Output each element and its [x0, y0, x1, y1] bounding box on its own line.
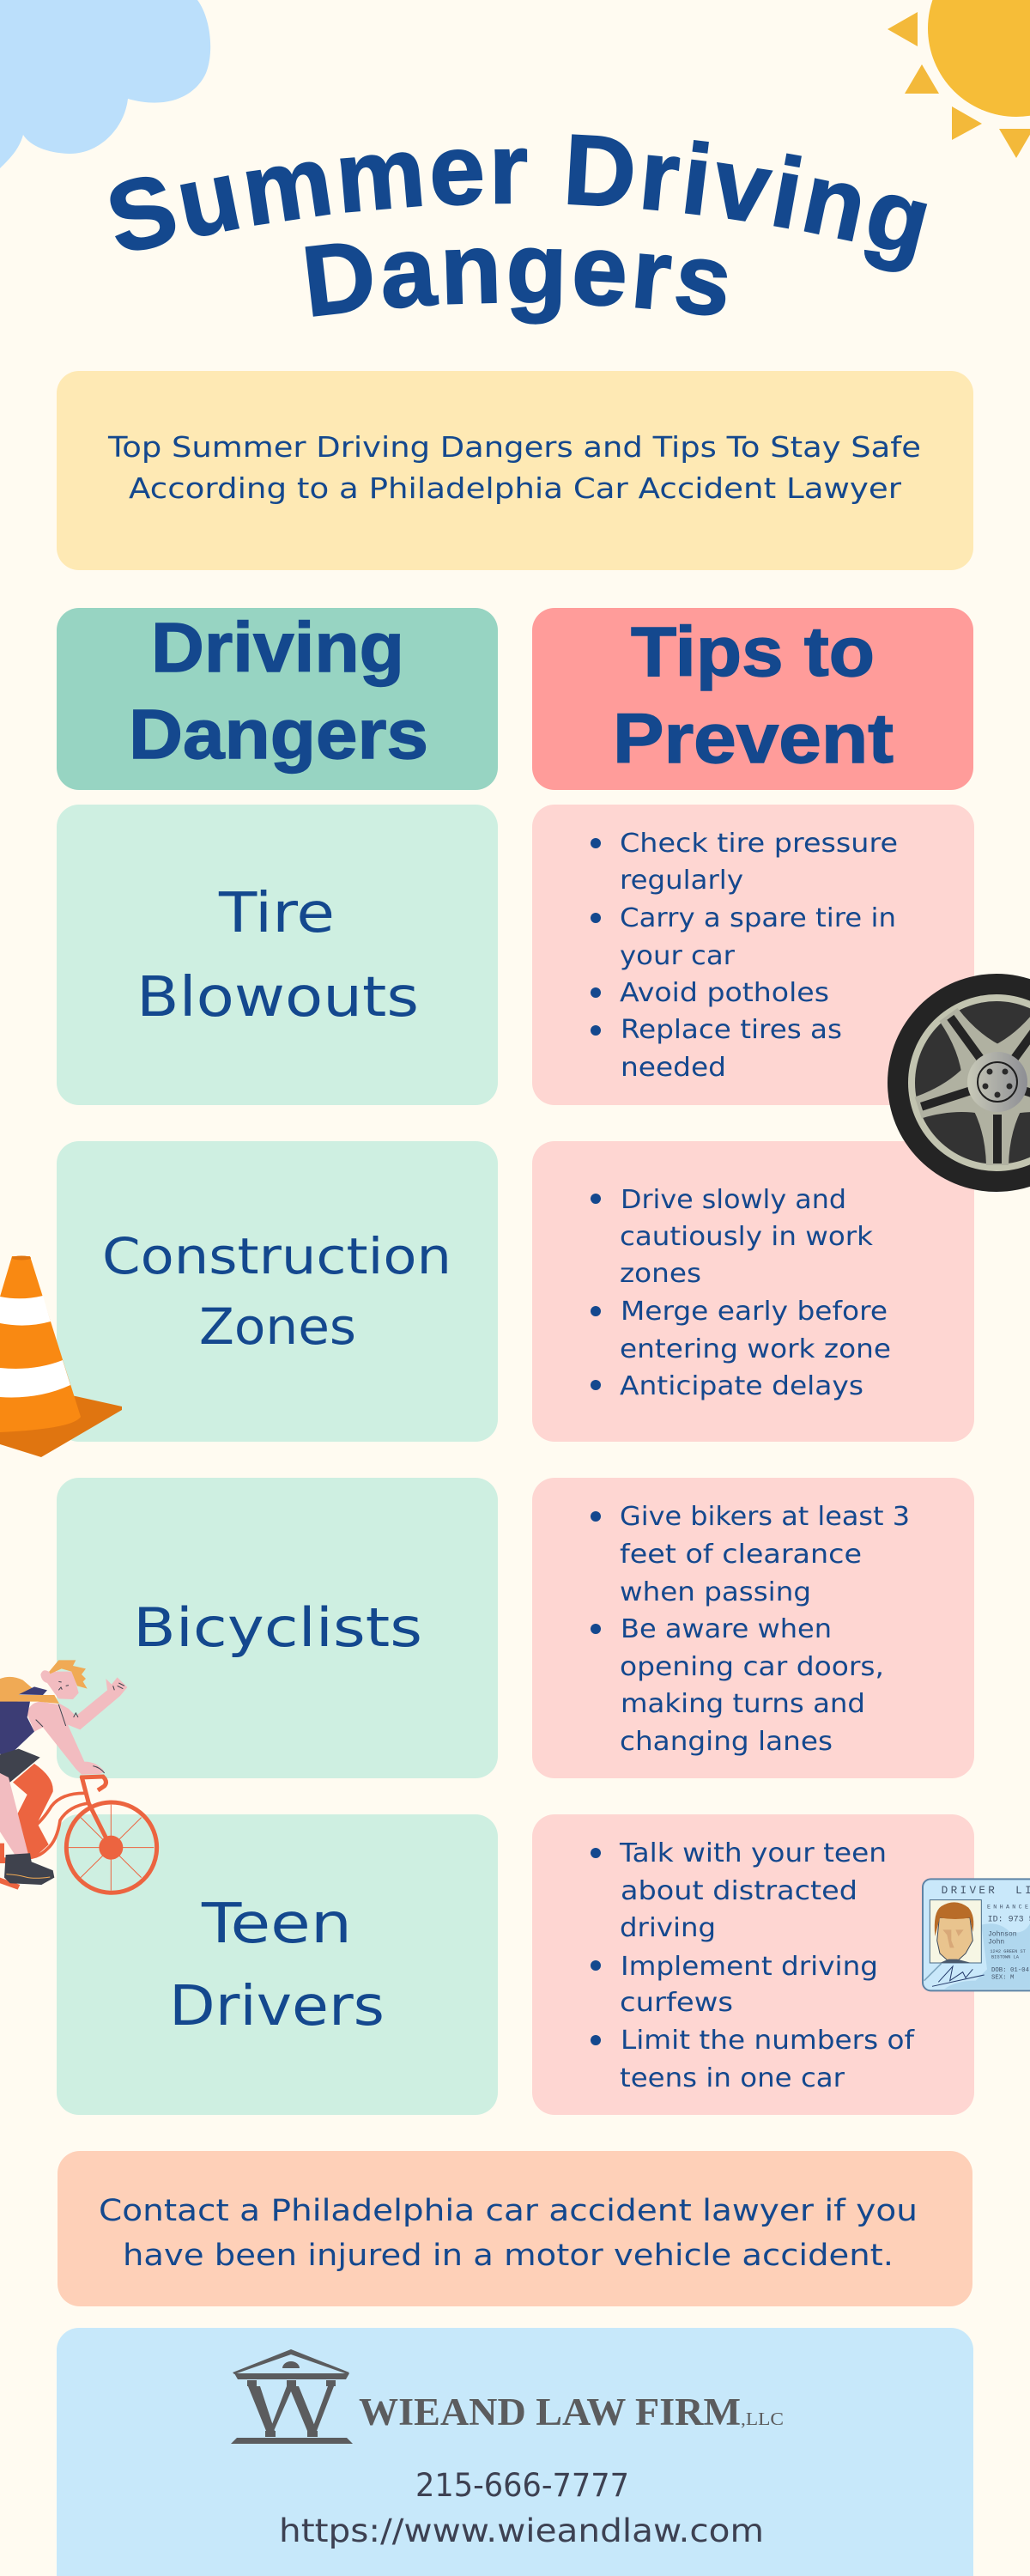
icon: driver license: Johnson — [988, 1930, 1017, 1938]
panel: bicyclist tips: changing lanes — [620, 1727, 833, 1757]
panel: tire blowouts: Blowouts — [136, 966, 419, 1030]
panel: tire tips: Replace tires as — [621, 1015, 842, 1045]
panel: tire tips: Avoid potholes — [620, 978, 829, 1008]
panel: intro: According to a Philadelphia Car Accident Lawyer — [129, 471, 901, 505]
panel: call to action — [58, 2151, 972, 2306]
icon: driver license: SEX: M — [991, 1974, 1014, 1981]
heading: tips to prevent: Prevent — [613, 700, 894, 778]
panel: teen tips: Implement driving — [621, 1952, 878, 1982]
panel: construction tips: cautiously in work — [620, 1222, 874, 1252]
heading: tips to prevent — [532, 608, 973, 790]
icon: driver license: BIGTOWN LA — [991, 1955, 1020, 1960]
panel: footer: ,LLC — [741, 2409, 784, 2429]
panel: tire tips: needed — [621, 1053, 726, 1083]
panel: teen drivers: Teen — [201, 1893, 352, 1956]
panel: footer: https://www.wieandlaw.com — [279, 2512, 764, 2549]
heading: driving dangers — [57, 608, 498, 790]
panel: teen drivers: Drivers — [169, 1975, 385, 2038]
panel: teen tips: teens in one car — [620, 2063, 845, 2093]
panel: bicyclist tips: feet of clearance — [620, 1540, 862, 1570]
panel: footer: WIEAND LAW FIRM — [359, 2391, 741, 2433]
icon: sun — [888, 0, 1030, 158]
panel: construction tips: Drive slowly and — [621, 1185, 846, 1215]
icon: driver license: DOB: 01-04 — [991, 1967, 1030, 1974]
panel: footer: 215-666-7777 — [415, 2467, 629, 2504]
panel: intro — [57, 371, 973, 570]
title: Summer Driving — [110, 134, 927, 272]
panel: tire blowouts — [57, 805, 498, 1105]
title — [110, 134, 927, 325]
panel: construction tips — [532, 1141, 974, 1442]
panel: construction zones — [57, 1141, 498, 1442]
icon: tire — [888, 974, 1030, 1192]
panel: bicyclist tips: Be aware when — [621, 1614, 832, 1644]
panel: tire tips: regularly — [620, 866, 743, 896]
panel: construction tips: Anticipate delays — [620, 1371, 863, 1401]
panel: call to action: Contact a Philadelphia car accident lawyer if you — [99, 2194, 918, 2228]
panel: tire blowouts: Tire — [218, 882, 335, 945]
panel: intro: Top Summer Driving Dangers and Tips To Stay Safe — [107, 430, 921, 464]
panel: bicyclist tips — [532, 1478, 974, 1778]
title: Dangers — [306, 244, 728, 325]
icon: traffic cone — [0, 1255, 122, 1457]
panel: call to action: have been injured in a motor vehicle accident. — [123, 2239, 894, 2273]
panel: bicyclist tips: Give bikers at least 3 — [620, 1502, 910, 1532]
icon: cloud — [0, 0, 210, 168]
panel: tire tips: Carry a spare tire in — [620, 903, 896, 933]
panel: teen tips: Limit the numbers of — [621, 2026, 916, 2056]
panel: tire tips: your car — [620, 941, 736, 971]
panel: tire tips — [532, 805, 974, 1105]
icon: driver license: John — [988, 1938, 1004, 1946]
heading: tips to prevent: Tips to — [631, 613, 875, 691]
panel: construction tips: zones — [620, 1259, 701, 1289]
panel: construction tips: Merge early before — [621, 1297, 888, 1327]
panel: footer — [57, 2328, 973, 2576]
panel: bicyclist tips: when passing — [620, 1577, 811, 1607]
panel: construction tips: entering work zone — [620, 1334, 891, 1364]
panel: bicyclist tips: opening car doors, — [620, 1652, 884, 1682]
icon: cyclist — [0, 1660, 157, 1893]
panel: tire tips: Check tire pressure — [620, 829, 898, 859]
panel: teen drivers — [57, 1814, 498, 2115]
panel: bicyclists — [57, 1478, 498, 1778]
panel: bicyclists: Bicyclists — [133, 1596, 422, 1659]
heading: driving dangers: Dangers — [129, 696, 428, 774]
icon: driver license: 1242 GREEN ST — [990, 1949, 1026, 1954]
panel: teen tips — [532, 1814, 974, 2115]
panel: construction zones: Zones — [199, 1297, 356, 1356]
panel: teen tips: driving — [620, 1913, 716, 1943]
icon: driver license — [923, 1879, 1030, 1990]
panel: teen tips: about distracted — [621, 1876, 857, 1906]
panel: bicyclist tips: making turns and — [621, 1689, 865, 1719]
logo: law firm — [231, 2349, 353, 2444]
heading: driving dangers: Driving — [151, 609, 404, 687]
panel: teen tips: Talk with your teen — [619, 1838, 887, 1868]
panel: construction zones: Construction — [102, 1227, 451, 1285]
panel: teen tips: curfews — [620, 1988, 733, 2018]
